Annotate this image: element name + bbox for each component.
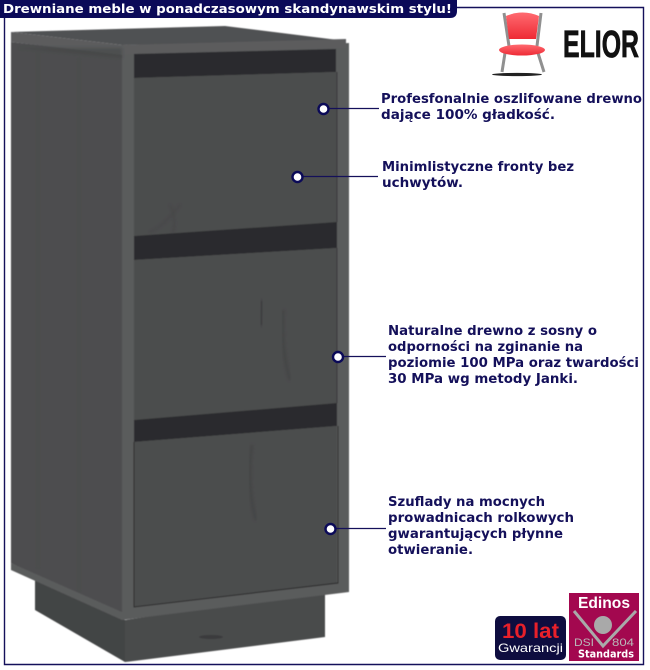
side wood grain — [18, 48, 122, 590]
callout 3: poziomie 100 MPa oraz twardości — [388, 356, 639, 371]
callout 4 — [326, 495, 574, 558]
header banner: Drewniane meble w ponadczasowym skandynawskim stylu! — [3, 1, 452, 16]
badge: Edinos standards: DSI — [574, 637, 594, 649]
callout 3: 30 MPa wg metody Janki. — [388, 372, 578, 387]
callout 3 — [333, 324, 639, 387]
callout 2: uchwytów. — [382, 176, 463, 191]
callout 1 — [318, 92, 642, 123]
callout 4: prowadnicach rolkowych — [388, 511, 574, 526]
gap 3 — [134, 403, 337, 442]
badge: Edinos standards — [569, 593, 639, 661]
drawer 2 — [134, 248, 337, 420]
callout 1: Profesfonalnie oszlifowane drewno — [381, 92, 642, 107]
drawer 1 — [134, 72, 337, 236]
badge: Edinos standards: 804 — [612, 637, 634, 649]
badge: 10 lat warranty: Gwarancji — [498, 641, 563, 655]
callout 4: Szuflady na mocnych — [388, 495, 545, 510]
callout 2: Minimlistyczne fronty bez — [382, 160, 574, 175]
opening under top — [134, 49, 336, 78]
callout 4: gwarantujących płynne — [388, 527, 563, 542]
badge: Edinos standards: Edinos — [578, 595, 630, 612]
callout 3: Naturalne drewno z sosny o — [388, 324, 597, 339]
callout 4: otwieranie. — [388, 543, 473, 558]
cabinet top — [11, 26, 346, 45]
callout 3: odporności na zginanie na — [388, 340, 583, 355]
badge: Edinos standards: Standards — [578, 648, 634, 660]
cabinet illustration — [11, 26, 349, 662]
plinth — [35, 575, 325, 662]
top front edge — [11, 32, 346, 55]
bottom edge — [11, 563, 122, 620]
callout 2 — [292, 160, 574, 191]
drawer 3 — [134, 426, 338, 607]
cabinet side panel — [11, 42, 122, 620]
gap 2 — [134, 222, 337, 260]
cabinet front frame — [122, 43, 349, 620]
logo: red chair — [492, 12, 545, 76]
badge: 10 lat warranty — [495, 616, 566, 660]
callout 1: dające 100% gładkość. — [381, 108, 555, 123]
badge: 10 lat warranty: 10 lat — [502, 620, 559, 643]
